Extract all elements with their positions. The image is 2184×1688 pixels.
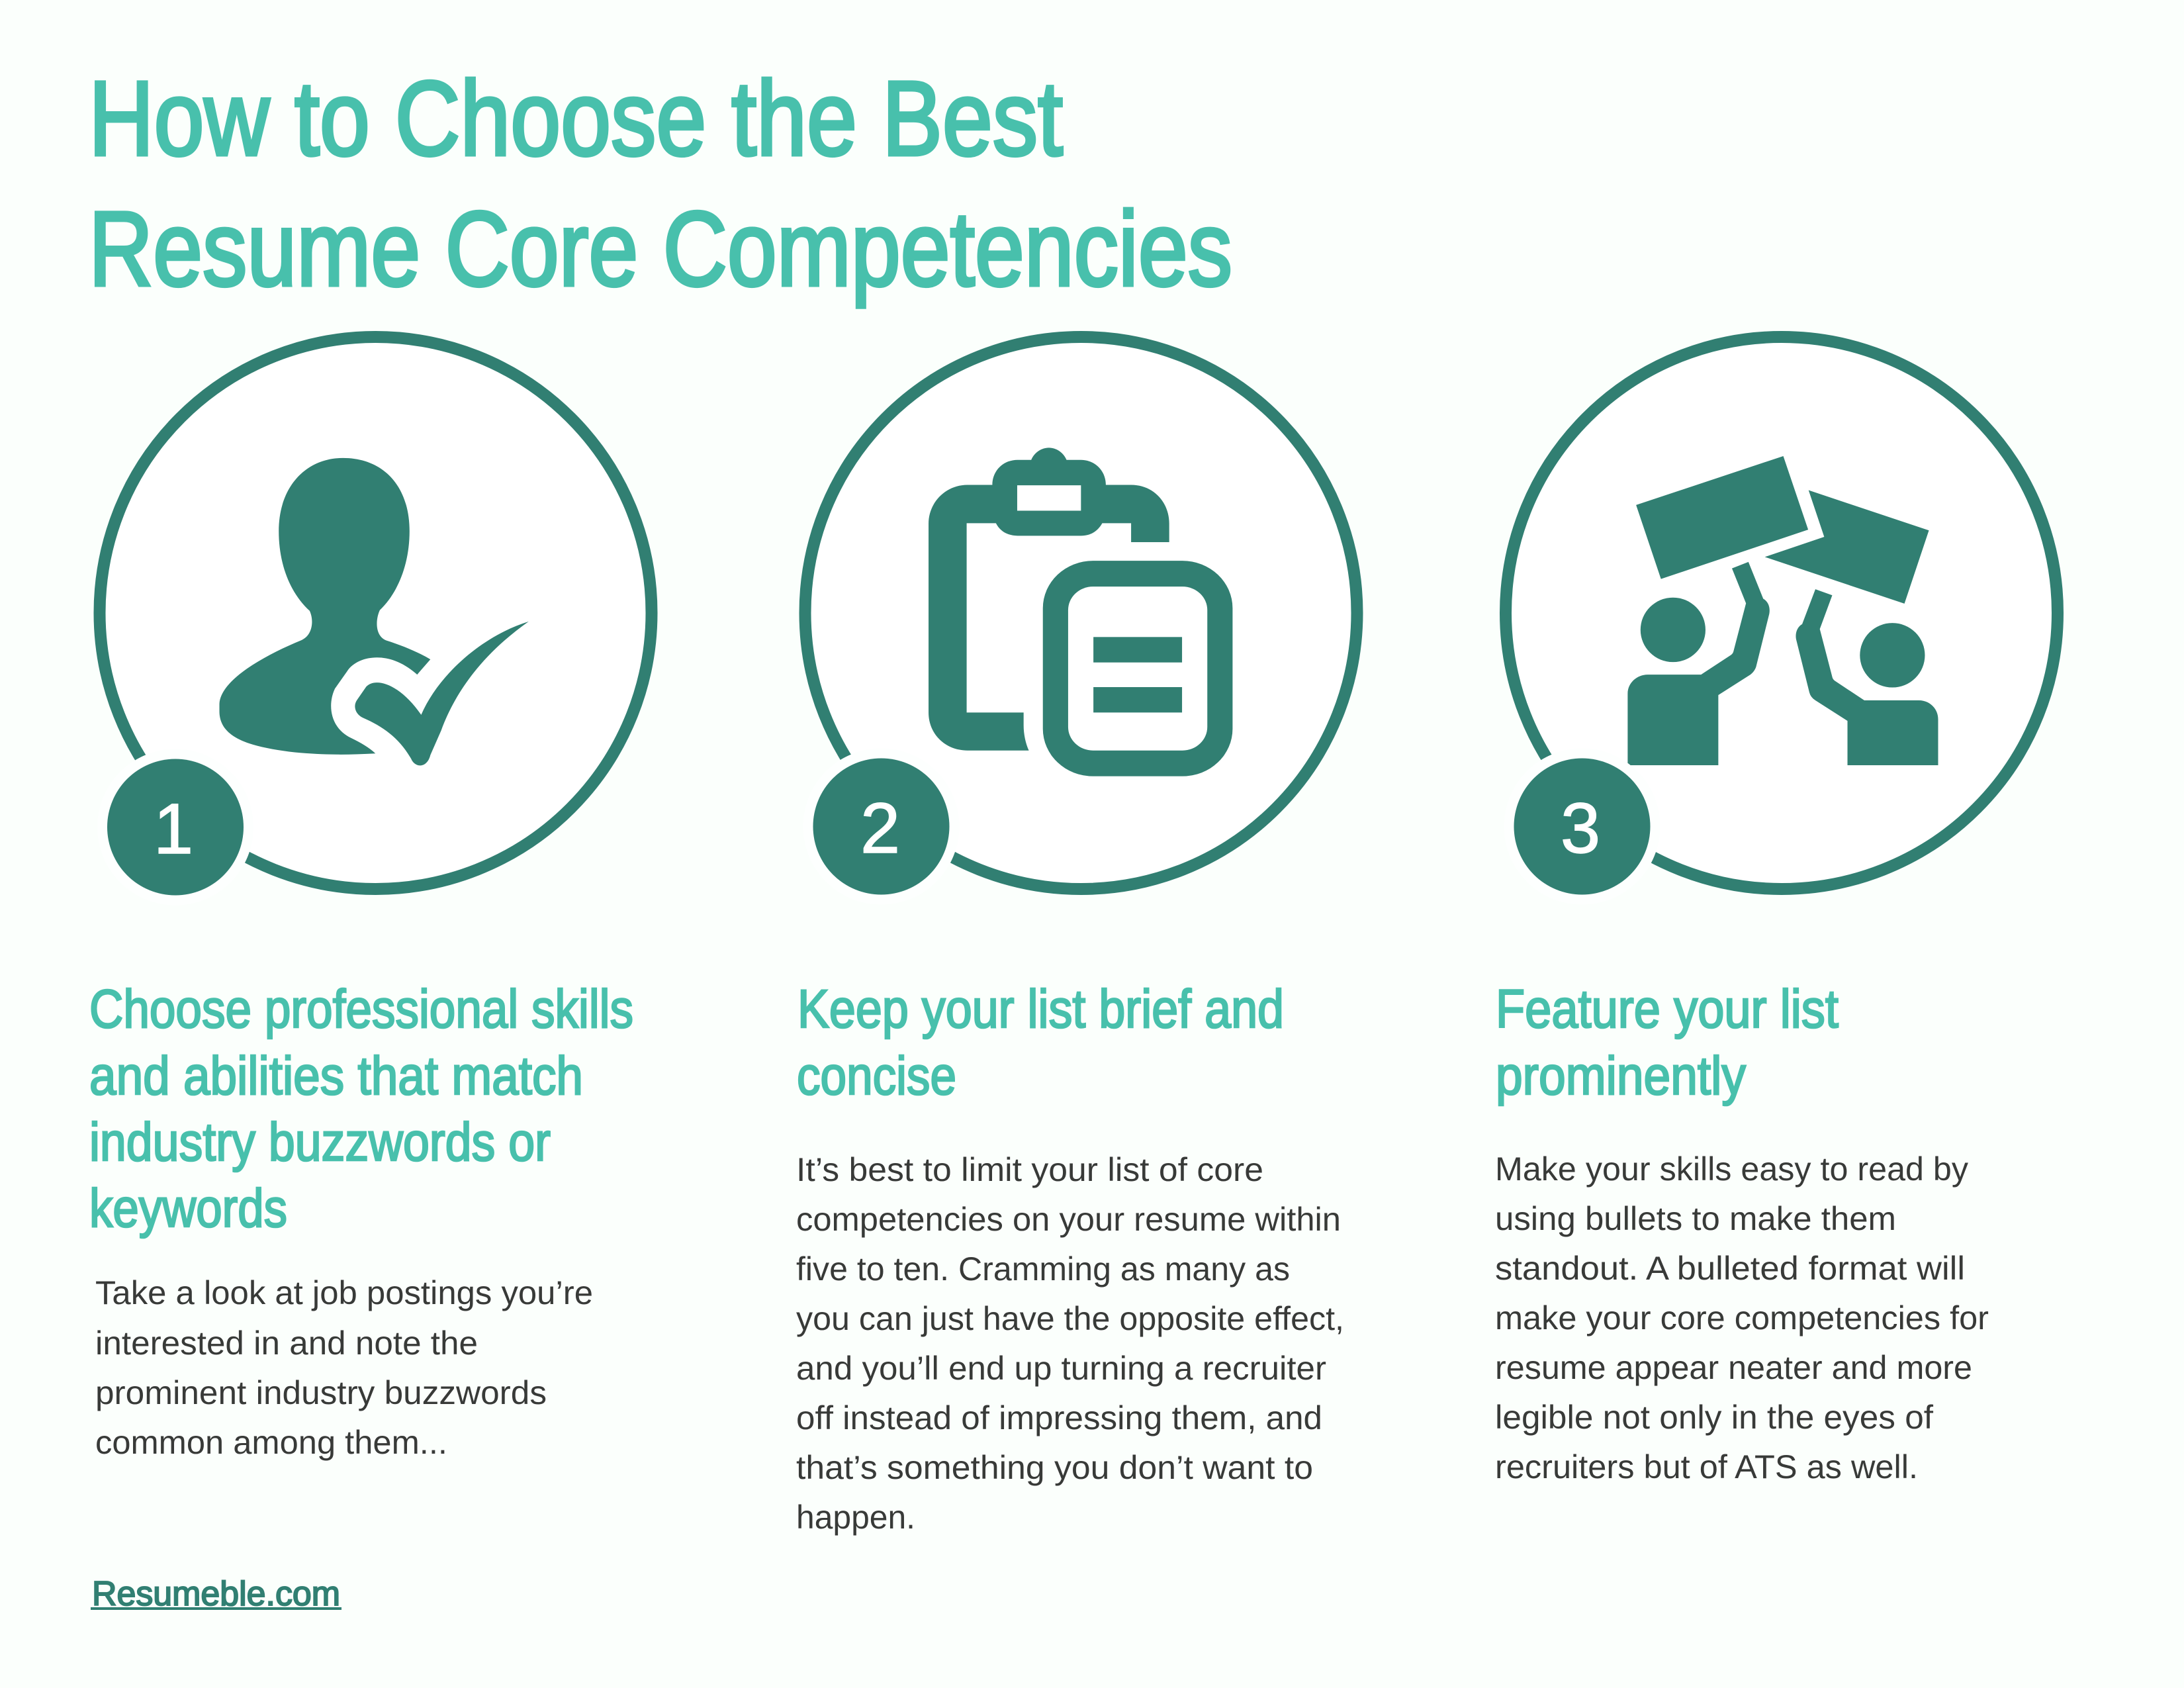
heading: step 3 (1496, 979, 1839, 1106)
heading: step 3: prominently (1496, 1046, 1746, 1106)
text block: step 3: Make your skills easy to read by (1495, 1150, 1968, 1188)
text block: step 2 (796, 1151, 1344, 1536)
heading: step 1: industry buzzwords or (89, 1112, 551, 1172)
text block: step 2: competencies on your resume within (796, 1201, 1341, 1238)
badge: number 2 (803, 748, 960, 904)
icon: two people raising signs (1627, 456, 1938, 765)
text block: step 3: using bullets to make them (1495, 1200, 1896, 1237)
panel: step 3 (1495, 337, 2058, 1485)
text block: step 3: standout. A bulleted format will (1495, 1250, 1965, 1287)
text block: step 1: prominent industry buzzwords (95, 1374, 547, 1411)
text block: step 2: happen. (796, 1499, 915, 1536)
circle ring 3 (1506, 337, 2058, 889)
title: How to Choose the Best (89, 59, 1063, 177)
text block: step 3 (1495, 1150, 1989, 1485)
text block: step 3: make your core competencies for (1495, 1299, 1989, 1336)
heading: step 2: concise (797, 1046, 956, 1106)
heading: step 3: Feature your list (1496, 979, 1839, 1039)
icon: clipboard with document (929, 447, 1232, 776)
circle ring 2 (805, 337, 1357, 889)
text block: step 3: legible not only in the eyes of (1495, 1399, 1933, 1436)
text block: step 1: common among them... (95, 1424, 447, 1461)
title: Resume Core Competencies (89, 189, 1232, 308)
badge: number 3 (1504, 748, 1660, 904)
text block: step 1: Take a look at job postings you’re (95, 1274, 593, 1311)
text block: step 2: and you’ll end up turning a recruiter (796, 1350, 1326, 1387)
badge: number 2: 2 (860, 788, 900, 868)
text block: step 1 (95, 1274, 593, 1461)
text block: step 2: off instead of impressing them, and (796, 1399, 1322, 1436)
circle ring 1 (99, 337, 651, 889)
badge: number 1: 1 (154, 788, 193, 868)
text block: step 2: that’s something you don’t want to (796, 1449, 1313, 1486)
panel: step 2 (796, 337, 1357, 1536)
text block: step 2: five to ten. Cramming as many as (796, 1250, 1290, 1288)
heading: step 2 (797, 979, 1284, 1106)
heading: step 1: and abilities that match (89, 1046, 583, 1106)
text block: step 2: It’s best to limit your list of core (796, 1151, 1263, 1188)
badge: number 1 (97, 749, 253, 906)
footer link: Resumeble.com: Resumeble.com (92, 1575, 340, 1613)
text block: step 3: resume appear neater and more (1495, 1349, 1972, 1386)
title (89, 59, 1232, 308)
heading: step 2: Keep your list brief and (797, 979, 1284, 1039)
panel: step 1 (89, 337, 651, 1461)
icon: person with check mark (220, 458, 529, 765)
heading: step 1 (89, 979, 633, 1239)
heading: step 1: Choose professional skills (89, 979, 633, 1039)
text block: step 3: recruiters but of ATS as well. (1495, 1448, 1918, 1485)
text block: step 2: you can just have the opposite effect, (796, 1300, 1344, 1337)
text block: step 1: interested in and note the (95, 1325, 478, 1362)
heading: step 1: keywords (89, 1178, 287, 1239)
badge: number 3: 3 (1561, 788, 1600, 868)
